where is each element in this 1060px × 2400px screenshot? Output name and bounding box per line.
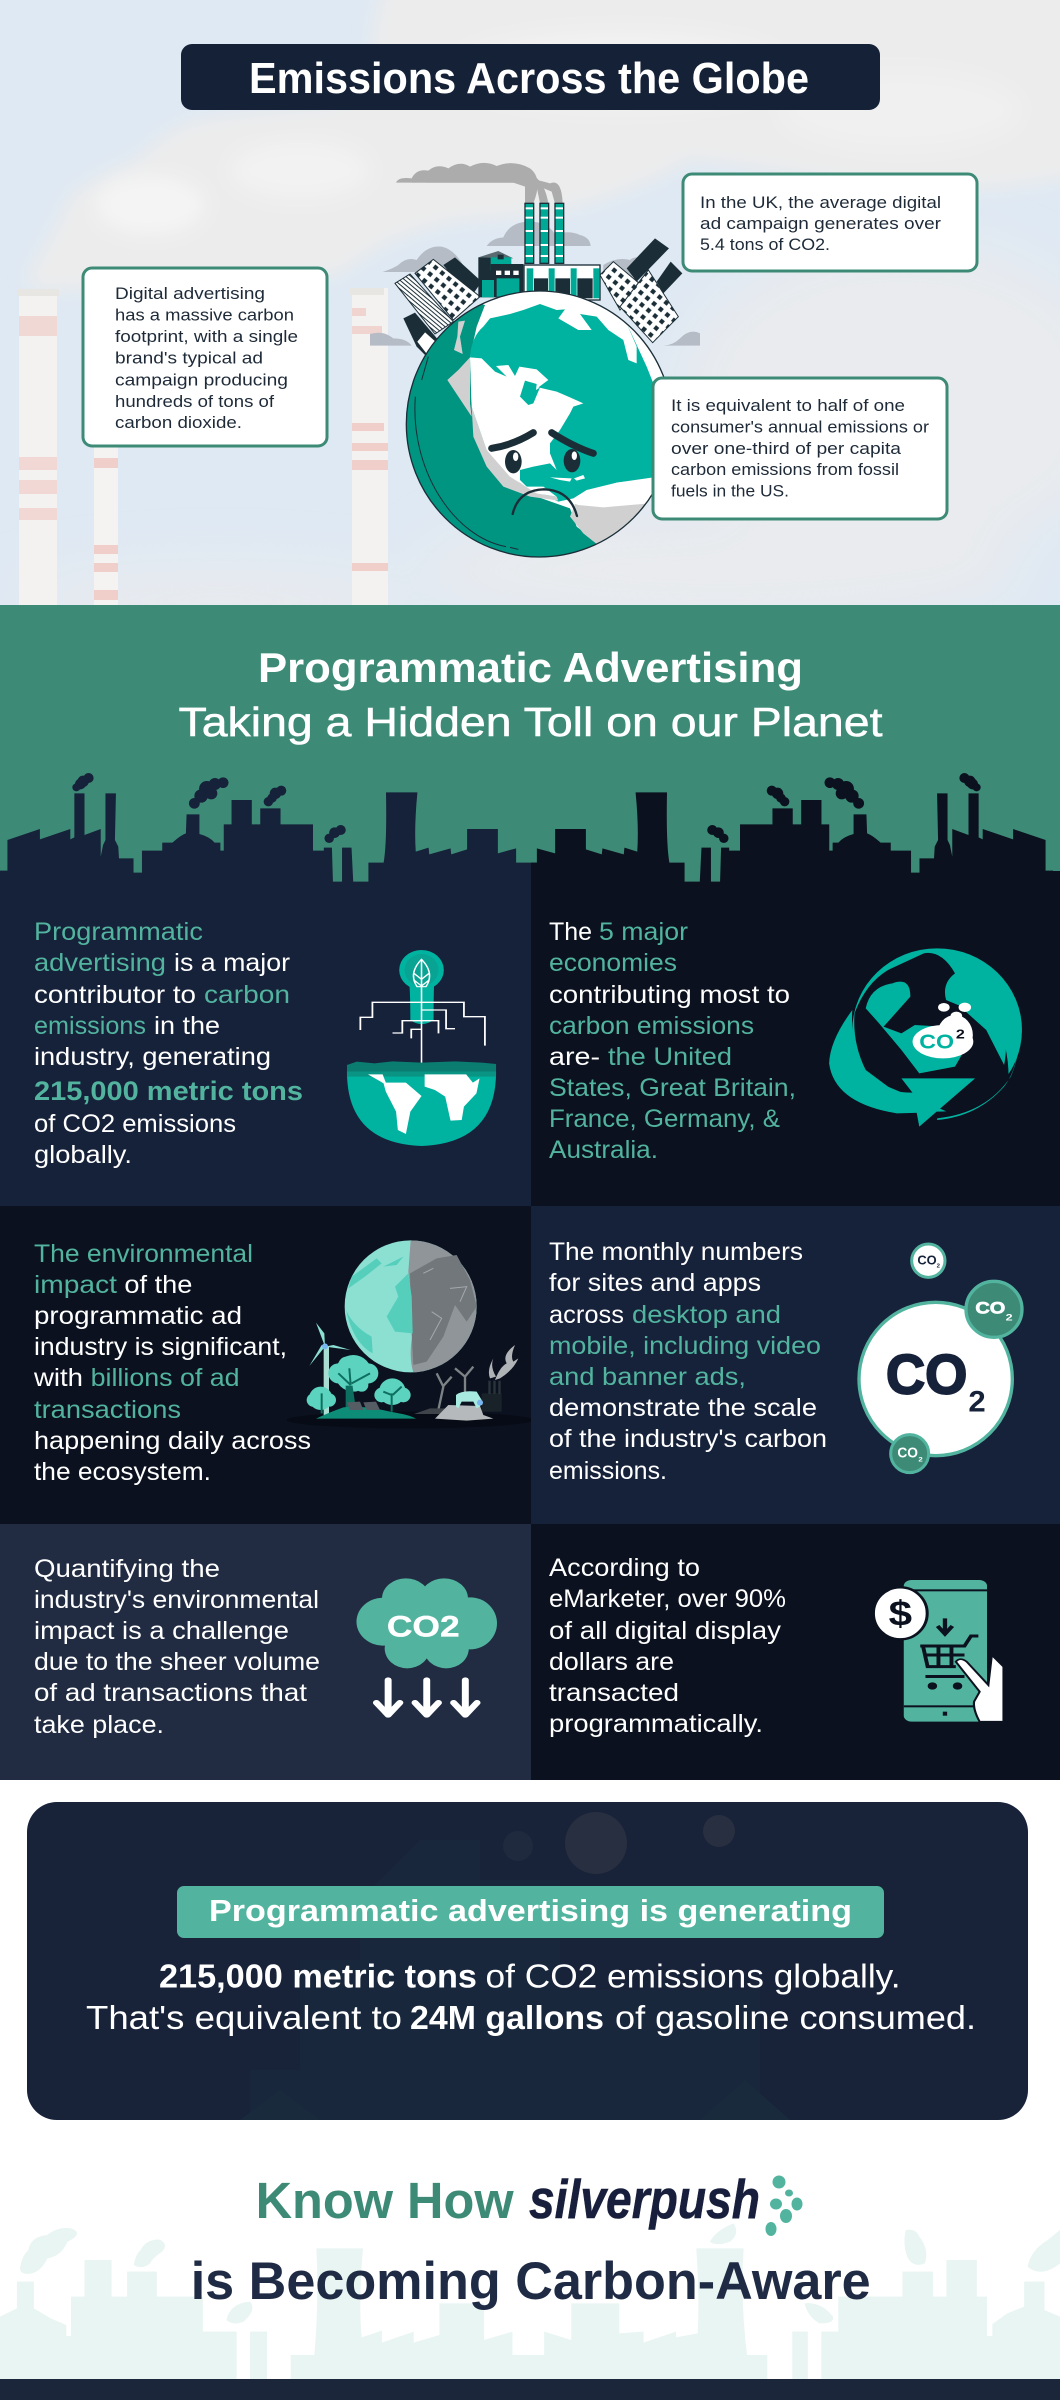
panel: environmental impact: of the <box>124 1271 192 1299</box>
chimney 3 <box>350 288 388 605</box>
title banner <box>181 44 880 110</box>
stat sentence <box>86 1958 976 2036</box>
closing heading: know how silverpush: Know How <box>256 2172 514 2229</box>
closing heading: know how silverpush <box>256 2168 760 2230</box>
icon: globe with arrow and CO2: 2 <box>956 1027 965 1042</box>
panel: five major economies: the United <box>608 1043 732 1071</box>
callout: UK campaign <box>683 174 977 271</box>
icon: phone with cart and dollar coin <box>873 1580 1004 1722</box>
heading: programmatic advertising: Programmatic Advertising <box>258 644 803 691</box>
panel: monthly numbers: mobile, including video <box>549 1332 821 1360</box>
chimney 2 <box>94 440 118 605</box>
panel: programmatic contributor: industry, generating <box>34 1043 271 1071</box>
panel: environmental impact: billions of ad <box>91 1364 240 1392</box>
panel: programmatic contributor: emissions <box>34 1012 146 1040</box>
panel: monthly numbers: desktop and <box>632 1301 781 1329</box>
callout: digital advertising footprint: footprint, with a single <box>115 327 298 346</box>
pill heading <box>177 1886 884 1938</box>
panel: sky hero background <box>0 0 1060 630</box>
panel: quantifying impact: due to the sheer volume <box>34 1648 320 1676</box>
panel: monthly numbers <box>531 1206 1060 1524</box>
heading: programmatic advertising <box>178 644 883 745</box>
footer bar <box>0 2379 1060 2400</box>
panel: five major economies: France, Germany, & <box>549 1105 780 1133</box>
panel: five major economies: The <box>549 918 592 946</box>
panel: programmatic contributor: is a major <box>174 949 290 977</box>
panel: five major economies: 5 major <box>599 918 688 946</box>
pale skyline backdrop <box>0 2223 1060 2379</box>
panel: programmatic contributor <box>0 885 531 1206</box>
panel: eMarketer stat: programmatically. <box>549 1710 763 1738</box>
panel: white lower background <box>0 1780 1060 2379</box>
stat sentence: of gasoline consumed. <box>615 1999 976 2036</box>
callout: equivalent emissions: fuels in the US. <box>671 482 789 500</box>
panel: quantifying impact: impact is a challenge <box>34 1617 289 1645</box>
callout: UK campaign: In the UK, the average digital <box>700 193 941 212</box>
callout: equivalent emissions: It is equivalent to half of one <box>671 396 905 415</box>
panel: quantifying impact: industry's environmental <box>34 1586 319 1614</box>
panel: programmatic contributor: globally. <box>34 1141 132 1169</box>
closing heading: carbon aware: is Becoming Carbon-Aware <box>191 2252 871 2311</box>
title banner: Emissions Across the Globe <box>249 54 809 103</box>
panel: programmatic contributor: 215,000 metric tons <box>34 1076 303 1106</box>
icon: CO2 cloud with down arrows <box>356 1578 497 1715</box>
panel: five major economies <box>531 885 1060 1206</box>
panel: environmental impact: The environmental <box>34 1240 253 1268</box>
silverpush wordmark: silverpush <box>529 2168 760 2230</box>
panel: monthly numbers: The monthly numbers <box>549 1238 803 1266</box>
panel: five major economies: economies <box>549 949 677 977</box>
panel: monthly numbers: of the industry's carbon <box>549 1425 827 1453</box>
callout: digital advertising footprint: Digital advertising <box>115 284 265 303</box>
stat sentence: 24M gallons <box>410 1999 604 2036</box>
callout: UK campaign: ad campaign generates over <box>700 214 941 233</box>
faded factory backdrop <box>565 1812 735 1874</box>
panel: quantifying impact: Quantifying the <box>34 1555 220 1583</box>
panel: quantifying impact: of ad transactions that <box>34 1679 307 1707</box>
skyline silhouette left <box>0 773 537 890</box>
skyline silhouette right <box>516 773 1060 890</box>
callout: digital advertising footprint: has a massive carbon <box>115 306 294 324</box>
panel: programmatic contributor: in the <box>154 1012 220 1040</box>
panel: programmatic contributor: contributor to <box>34 981 196 1009</box>
callout: equivalent emissions: carbon emissions from fossil <box>671 460 899 479</box>
panel: environmental impact: programmatic ad <box>34 1302 242 1330</box>
panel: monthly numbers: and banner ads, <box>549 1363 746 1391</box>
panel: environmental impact: impact <box>34 1271 117 1299</box>
icon: CO2 bubbles: CO <box>975 1299 1005 1318</box>
icon: CO2 bubbles: 2 <box>937 1264 940 1270</box>
panel: monthly numbers: across <box>549 1301 624 1329</box>
background grey clouds <box>370 222 700 346</box>
illustration: sad earth with factories <box>370 163 700 567</box>
icon: CO2 bubbles: CO <box>897 1445 918 1461</box>
panel: five major economies: Australia. <box>549 1136 658 1164</box>
smoke plume <box>396 163 563 203</box>
panel: environmental impact: industry is significant, <box>34 1333 287 1361</box>
panel: eMarketer stat: transacted <box>549 1679 679 1707</box>
sad face <box>492 433 593 516</box>
panel: eMarketer stat: dollars are <box>549 1648 674 1676</box>
panel: programmatic contributor: of CO2 emissions <box>34 1110 236 1138</box>
icon: CO2 bubbles: CO <box>886 1342 967 1405</box>
panel: quantifying impact <box>0 1524 531 1780</box>
callout: equivalent emissions: consumer's annual emissions or <box>671 418 929 436</box>
callout: digital advertising footprint: hundreds of tons of <box>115 392 274 411</box>
icon: lightbulb tree over half globe <box>347 950 496 1146</box>
callout: equivalent emissions <box>653 378 947 519</box>
panel: eMarketer stat <box>531 1524 1060 1780</box>
icon: CO2 bubbles <box>859 1244 1022 1473</box>
panel: monthly numbers: emissions. <box>549 1457 667 1485</box>
panel: environmental impact: transactions <box>34 1396 181 1424</box>
callout: UK campaign: 5.4 tons of CO2. <box>700 235 830 254</box>
panel: programmatic contributor: carbon <box>204 981 290 1009</box>
panel: five major economies: carbon emissions <box>549 1012 754 1040</box>
panel: environmental impact: the ecosystem. <box>34 1458 211 1486</box>
icon: globe with arrow and CO2: CO <box>919 1031 954 1053</box>
pill heading: Programmatic advertising is generating <box>209 1893 852 1928</box>
callout: equivalent emissions: over one-third of per capita <box>671 439 902 458</box>
factory with chimneys <box>478 203 600 300</box>
icon: globe with arrow and CO2 <box>829 948 1022 1127</box>
panel: environmental impact <box>0 1206 531 1524</box>
panel: monthly numbers: demonstrate the scale <box>549 1394 817 1422</box>
left city <box>395 257 482 357</box>
heading: programmatic advertising: Taking a Hidden Toll on our Planet <box>178 699 883 745</box>
callout: digital advertising footprint: brand's typical ad <box>115 348 263 368</box>
panel: eMarketer stat: eMarketer, over 90% <box>549 1585 786 1613</box>
icon: CO2 bubbles: 2 <box>1006 1313 1013 1323</box>
icon: half healthy half dying earth scene <box>287 1240 533 1428</box>
icon: phone with cart and dollar coin: $ <box>889 1594 912 1633</box>
callout: generating stat card <box>27 1802 1028 2120</box>
panel: monthly numbers: for sites and apps <box>549 1269 761 1297</box>
stat sentence: 215,000 metric tons <box>159 1958 477 1994</box>
earth globe <box>406 290 664 558</box>
panel: green heading band <box>0 605 1060 885</box>
panel: five major economies: are- <box>549 1043 600 1071</box>
icon: CO2 bubbles: CO <box>917 1252 937 1267</box>
callout: digital advertising footprint: carbon dioxide. <box>115 413 242 432</box>
right city <box>600 238 682 343</box>
panel: eMarketer stat: According to <box>549 1554 700 1582</box>
panel: programmatic contributor: advertising <box>34 949 166 977</box>
panel: programmatic contributor: Programmatic <box>34 918 203 946</box>
panel: eMarketer stat: of all digital display <box>549 1617 782 1645</box>
icon: silverpush dots <box>766 2176 802 2236</box>
callout: digital advertising footprint: campaign producing <box>115 370 288 390</box>
icon: CO2 bubbles: 2 <box>968 1386 986 1419</box>
panel: environmental impact: happening daily across <box>34 1427 311 1455</box>
callout: digital advertising footprint <box>83 268 327 446</box>
panel: five major economies: States, Great Britain, <box>549 1074 796 1102</box>
stat sentence: of CO2 emissions globally. <box>486 1958 900 1994</box>
panel: five major economies: contributing most to <box>549 981 790 1009</box>
chimney 1 <box>17 289 59 605</box>
icon: CO2 cloud with down arrows: CO2 <box>387 1611 460 1644</box>
icon: CO2 bubbles: 2 <box>918 1457 923 1464</box>
panel: environmental impact: with <box>33 1364 83 1392</box>
panel: quantifying impact: take place. <box>34 1711 164 1739</box>
smoke clouds <box>20 0 1060 630</box>
stat sentence: That's equivalent to <box>86 1999 402 2036</box>
